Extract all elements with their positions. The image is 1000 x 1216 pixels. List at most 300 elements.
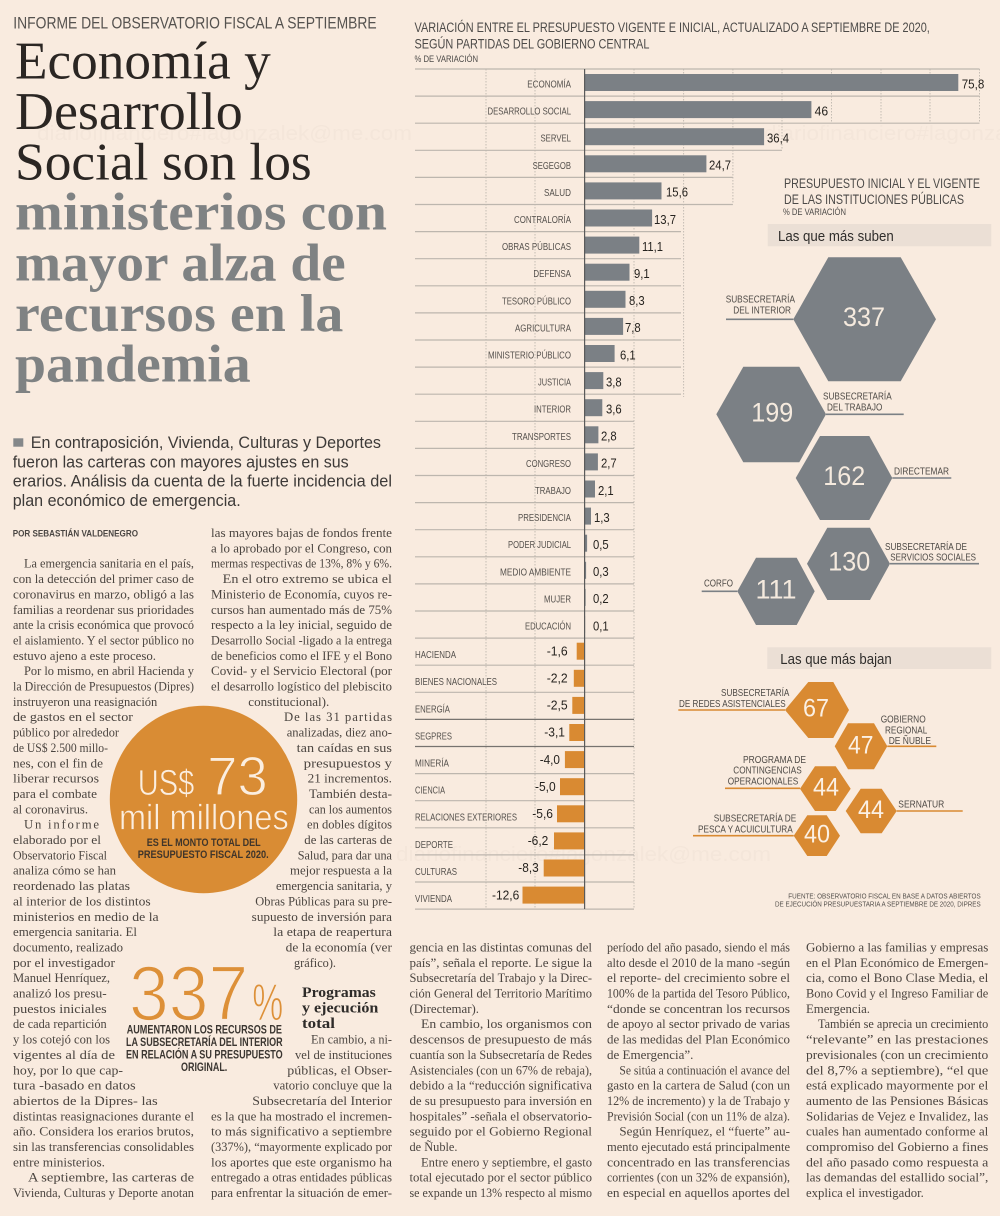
body text: column 3: de Ñuble. — [410, 1140, 458, 1154]
body text: column 1: familias a reordenar sus prioridades — [13, 603, 194, 617]
watermark: diariofinanciero#lagonzalek@me.com — [396, 844, 771, 866]
subheading — [13, 434, 392, 510]
body text: column 1: la Dirección de Presupuestos (Dipres) — [13, 680, 194, 694]
row: Justicia: JUSTICIA — [538, 378, 571, 389]
subheading: Programas y ejecución total — [302, 985, 379, 1032]
body text: column 2: de beneficios como el IFE y el Bono — [211, 649, 392, 663]
body text: column 2: para enfrentar la situación de emer- — [211, 1186, 392, 1200]
body text: column 5: está explicado mayormente por el — [806, 1079, 989, 1093]
row: Tesoro Público — [502, 291, 645, 308]
body text: column 2: el desarrollo logístico del plebiscito — [211, 680, 392, 694]
row: Deporte: -6,2 — [528, 834, 548, 848]
callout: 337%: EN RELACIÓN A SU PRESUPUESTO — [126, 1047, 283, 1061]
body text: column 3: ción General del Territorio Marítimo — [410, 986, 592, 1000]
body text: column 1: con la detección del primer caso de — [13, 572, 194, 586]
hexagon: Programa de Contingencias Operacionales 44 — [725, 754, 851, 811]
body text: column 2: De las 31 partidas — [284, 710, 392, 724]
callout: US$ 73 mil millones: 73 — [207, 745, 268, 807]
watermark — [37, 123, 1000, 866]
body text: column 2: constitucional). — [248, 695, 329, 709]
hexagon: Subsecretaría de Pesca y Acuicultura 40: PESCA Y ACUICULTURA — [698, 823, 793, 835]
row: Justicia — [538, 372, 622, 389]
title: ministerios con — [15, 183, 387, 241]
row: Presidencia: 1,3 — [594, 511, 610, 525]
body text: column 5: cia, como el Bono Clase Media, el — [806, 971, 989, 985]
body text: column 2: gráfico). — [294, 956, 336, 970]
body text: column 4: 12% de incremento) y la de Trabajo y — [607, 1094, 791, 1108]
chart heading — [414, 20, 930, 64]
row: Mujer: 0,2 — [593, 592, 609, 606]
row: Transportes: TRANSPORTES — [512, 432, 571, 443]
row: Segegob — [533, 155, 731, 173]
subheading: plan económico de emergencia. — [13, 492, 241, 510]
source note — [775, 891, 981, 908]
body text: column 2: Salud, para dar una — [298, 848, 392, 862]
body text: column 5: También se aprecia un crecimiento — [818, 1017, 988, 1031]
body text: column 2: de la economía (ver — [286, 940, 393, 954]
callout: 337%: LA SUBSECRETARÍA DEL INTERIOR — [126, 1035, 283, 1049]
row: Contraloría — [514, 210, 676, 227]
hexagon: Subsecretaría del Interior 337: 337 — [843, 302, 885, 332]
row: Hacienda: -1,6 — [547, 644, 568, 658]
row: Ciencia — [415, 778, 585, 797]
hexagon: Subsecretaría de Pesca y Acuicultura 40: 40 — [804, 820, 830, 848]
body text: column 3: gencia en las distintas comunas del — [410, 940, 592, 954]
row: Interior: INTERIOR — [534, 405, 571, 416]
title: recursos en la — [15, 285, 343, 343]
row: Bienes Nacionales: -2,2 — [547, 672, 568, 686]
body text: column 4: concentrado en las transferencias — [607, 1155, 790, 1169]
body text: column 1: A septiembre, las carteras de — [28, 1171, 194, 1185]
body text: column 3: total ejecutado por el sector público — [410, 1171, 592, 1185]
callout: 337% — [126, 949, 283, 1074]
body text: column 2: En cambio, a ni- — [311, 1033, 392, 1047]
row: Energía: ENERGÍA — [415, 702, 450, 715]
row: Trabajo — [535, 480, 614, 498]
body text: column 4: gasto en la cartera de Salud (con un — [607, 1079, 791, 1093]
watermark: diariofinanciero#lagonzalek@me.com — [37, 123, 412, 145]
subheading: Programas y ejecución total: y ejecución — [302, 1001, 379, 1017]
hexagon: Subsecretaría de Redes Asistenciales 67: DE REDES ASISTENCIALES — [679, 698, 786, 710]
hexagon: Directemar 162 — [796, 436, 951, 520]
body text: column 2: Obras Públicas para su pre- — [255, 894, 392, 908]
body text: column 4: 100% de la partida del Tesoro Público, — [607, 986, 790, 1000]
subheading: erarios. Análisis da cuenta de la fuerte incidencia del — [13, 473, 392, 491]
body text: column 3: se expande un 13% respecto al mismo — [410, 1186, 592, 1200]
body text: column 1: Un informe — [24, 818, 99, 832]
body text: column 2: mermas respectivas de 13%, 8% y 6%. — [211, 557, 392, 571]
body text: column 1: entre ministerios. — [13, 1155, 105, 1169]
subheading: Programas y ejecución total: total — [302, 1016, 335, 1032]
subheading: fueron las carteras con mayores ajustes en sus — [13, 453, 349, 471]
callout: US$ 73 mil millones — [110, 706, 297, 893]
title: mayor alza de — [15, 235, 346, 293]
row: Medio Ambiente: MEDIO AMBIENTE — [500, 567, 571, 578]
body text: column 2: to más significativo a septiembre — [211, 1125, 392, 1139]
hexagon: Corfo 111: 111 — [756, 574, 796, 604]
body text: column 2: Subsecretaría del Interior — [252, 1094, 393, 1108]
hexagon: Directemar 162: 162 — [823, 461, 865, 491]
body text: column 1: ministerios en medio de la — [13, 910, 159, 924]
body text: column 1: tura -basado en datos — [13, 1079, 136, 1093]
body text: column 3: En cambio, los organismos con — [421, 1017, 593, 1031]
row: Culturas: -8,3 — [518, 861, 539, 875]
hexagon: Subsecretaría de Redes Asistenciales 67: 67 — [803, 695, 829, 723]
panel heading: las que más bajan: Las que más bajan — [780, 651, 892, 668]
row: Interior: 3,6 — [606, 403, 622, 417]
body text: column 1: de gastos en el sector — [13, 710, 134, 724]
body text: column 1: al interior de los distintos — [13, 894, 151, 908]
body text: column 2: Desarrollo Social -ligado a la entrega — [211, 634, 392, 648]
row: Ministerio Público — [488, 345, 636, 362]
body text: column 2: es la que ha mostrado el incremen- — [211, 1109, 392, 1123]
body text: column 3: país”, señala el reporte. Le sigue la — [410, 956, 592, 970]
title: Social son los — [15, 133, 312, 191]
hexagon: Subsecretaría de Servicios Sociales 130: 130 — [828, 546, 870, 576]
body text: column 5: Gobierno a las familias y empresas — [806, 940, 988, 954]
body text: column 4: corrientes (con un 32% de expansión), — [607, 1171, 790, 1185]
row: Obras Públicas: OBRAS PÚBLICAS — [502, 240, 571, 253]
bar chart: variación por partida — [415, 69, 984, 909]
hexagon: Sernatur 44: SERNATUR — [898, 799, 945, 811]
body text: column 1: liberar recursos — [13, 772, 99, 786]
hexagon: Programa de Contingencias Operacionales 44: 44 — [813, 774, 839, 802]
body text: column 1: analiza cómo se han — [13, 864, 117, 878]
body text: column 5: las demandas del estallido social”, — [806, 1171, 988, 1185]
hexagon: Sernatur 44: 44 — [858, 796, 884, 824]
body text: column 3: Subsecretaría del Trabajo y la Direc- — [410, 971, 592, 985]
body text: column 2: de las carteras de — [304, 833, 392, 847]
body text: column 2: en dobles dígitos — [307, 818, 392, 832]
row: Medio Ambiente — [500, 562, 609, 579]
body text: column 1: Observatorio Fiscal — [13, 848, 107, 862]
row: Poder Judicial: PODER JUDICIAL — [508, 540, 571, 551]
body text: column 4: mento ejecutado está principalmente — [607, 1140, 790, 1154]
row: Segpres: SEGPRES — [415, 731, 452, 742]
body text: column 3: debido a la “reducción significativa — [410, 1079, 592, 1093]
body text: column 5: explica el investigador. — [806, 1186, 924, 1200]
row: Ciencia: -5,0 — [535, 780, 556, 794]
body text: column 1: nes, con el fin de — [13, 756, 103, 770]
body text: column 1: coronavirus en marzo, obligó a las — [13, 587, 194, 601]
body text: column 1: La emergencia sanitaria en el país, — [24, 557, 194, 571]
row: Obras Públicas: 11,1 — [642, 240, 663, 254]
row: Servel: 36,4 — [767, 131, 789, 145]
body text: column 5: en el Plan Económico de Emergen- — [806, 956, 988, 970]
body text: column 2: Covid- y el Servicio Electoral (por — [211, 664, 393, 678]
body text: column 5: del año pasado como respuesta a — [806, 1155, 989, 1169]
hexagon: Subsecretaría de Servicios Sociales 130: SUBSECRETARÍA DE — [885, 540, 967, 553]
body text: column 4: Según Henríquez, el “fuerte” au- — [619, 1125, 790, 1139]
body text: column 3: seguido por el Gobierno Regional — [410, 1125, 593, 1139]
row: Defensa: DEFENSA — [533, 269, 571, 280]
body text: column 4: “donde se concentran los recursos — [607, 1002, 790, 1016]
body text: column 1: sin las transferencias consolidables — [13, 1140, 194, 1154]
row: Energía — [415, 697, 585, 715]
body text: column 1: analizó los presu- — [13, 986, 107, 1000]
callout: 337%: ORIGINAL. — [181, 1060, 227, 1074]
row: Hacienda — [415, 643, 585, 661]
row: Ministerio Público: 6,1 — [620, 348, 636, 362]
row: Culturas: CULTURAS — [415, 867, 457, 878]
hexagon: Programa de Contingencias Operacionales 44: PROGRAMA DE — [743, 754, 806, 766]
row: Justicia: 3,8 — [606, 375, 622, 389]
body text: column 4: de las medidas del Plan Económico — [607, 1033, 790, 1047]
body text: column 3: Asistenciales (con un 67% de rebaja), — [410, 1063, 592, 1077]
callout: US$ 73 mil millones: PRESUPUESTO FISCAL 2020. — [138, 849, 269, 861]
callout: 337%: AUMENTARON LOS RECURSOS DE — [127, 1022, 282, 1036]
hexagon: Subsecretaría de Servicios Sociales 130: SERVICIOS SOCIALES — [890, 552, 976, 564]
body text: column 3: cuantía son la Subsecretaría de Redes — [410, 1048, 592, 1062]
body text: column 1: reordenado las platas — [13, 879, 130, 893]
body text: column 1: año. Considera los erarios brutos, — [13, 1125, 194, 1139]
body text: column 5: “relevante” en las prestaciones — [806, 1033, 988, 1047]
body text: column 1: estuvo ajeno a este proceso. — [13, 649, 156, 663]
callout: US$ 73 mil millones: US$ — [138, 762, 194, 803]
body text: column 4: período del año pasado, siendo el más — [607, 940, 790, 954]
body text: column 2: respecto a la ley inicial, seguido de — [211, 618, 392, 632]
hexagon: Directemar 162: DIRECTEMAR — [894, 465, 949, 477]
subheading: Programas y ejecución total: Programas — [302, 985, 376, 1001]
callout: US$ 73 mil millones: ES EL MONTO TOTAL DEL — [147, 837, 261, 849]
body text: column 1: Manuel Henríquez, — [13, 971, 110, 985]
row: Servel: SERVEL — [540, 134, 571, 145]
row: Energía: -2,5 — [547, 699, 568, 713]
row: Segpres: -3,1 — [544, 726, 565, 740]
row: Minería — [415, 751, 585, 770]
body text: column 2: públicas, el Obser- — [287, 1063, 392, 1077]
row: Vivienda — [415, 887, 585, 905]
body text: column 1: público por alrededor — [13, 726, 120, 740]
row: Economía — [527, 74, 984, 91]
hexagon: Subsecretaría de Servicios Sociales 130 — [807, 528, 979, 600]
row: Mujer: MUJER — [544, 594, 571, 605]
body text: column 5: previsionales (con un crecimiento — [806, 1048, 988, 1062]
body text: column 1: Vivienda, Culturas y Deporte anotan — [13, 1186, 195, 1200]
row: Congreso: 2,7 — [601, 457, 617, 471]
row: Minería: MINERÍA — [415, 756, 449, 770]
callout: 337%: % — [252, 974, 283, 1032]
body text: column 2: tan caídas en sus — [297, 741, 392, 755]
heading: presupuesto inicial y vigente — [783, 176, 980, 217]
body text: column 3: de su presupuesto para inversión en — [410, 1094, 593, 1108]
row: Medio Ambiente: 0,3 — [593, 565, 609, 579]
hexagon: Gobierno Regional de Ñuble 47: REGIONAL — [885, 724, 927, 736]
row: Mujer — [544, 589, 609, 606]
row: Ministerio Público: MINISTERIO PÚBLICO — [488, 348, 571, 362]
row: Deporte — [415, 832, 585, 851]
row: Ciencia: CIENCIA — [415, 786, 445, 797]
body text: column 2: vatorio concluye que la — [273, 1079, 392, 1093]
row: Servel — [540, 128, 789, 146]
row: Congreso: CONGRESO — [526, 459, 571, 470]
body text: column 2: la etapa de reapertura — [273, 925, 392, 939]
title: Economía y — [15, 32, 271, 90]
row: Segegob: SEGEGOB — [533, 161, 571, 172]
row: Presidencia — [518, 508, 610, 525]
row: Interior — [534, 399, 622, 416]
row: Contraloría: 13,7 — [654, 213, 676, 227]
body text: column 4: alto desde el 2010 de la mano -según — [607, 956, 791, 970]
row: Trabajo: 2,1 — [598, 484, 614, 498]
body text: column 5: del 8,7% a septiembre), “el que — [806, 1063, 989, 1077]
row: Contraloría: CONTRALORÍA — [514, 213, 571, 226]
row: Agricultura: AGRICULTURA — [515, 323, 571, 334]
body text: column 1: al coronavirus. — [13, 802, 88, 816]
row: Vivienda: -12,6 — [492, 888, 519, 902]
row: Relaciones Exteriores: -5,6 — [532, 807, 553, 821]
body text: column 5: Emergencia. — [806, 1002, 870, 1016]
row: Bienes Nacionales: BIENES NACIONALES — [415, 677, 497, 688]
hexagon: Gobierno Regional de Ñuble 47 — [835, 714, 936, 769]
body text: column 1: documento, realizado — [13, 940, 123, 954]
heading: presupuesto inicial y vigente: % DE VARIACIÓN — [783, 207, 846, 217]
body text: column 1: distintas reasignaciones durante el — [13, 1109, 194, 1123]
body text: column 1: el aislamiento. Y el sector público no — [13, 634, 194, 648]
hexagon: Subsecretaría del Trabajo 199: DEL TRABAJO — [827, 401, 882, 413]
body text: column 5: Solidarias de Vejez e Invalidez, las — [806, 1109, 988, 1123]
hexagon: Programa de Contingencias Operacionales 44: OPERACIONALES — [728, 775, 798, 787]
body text: column 2: vel de instituciones — [295, 1048, 392, 1062]
body text: column 2: (337%), “mayormente explicado por — [211, 1140, 393, 1154]
hexagon: Subsecretaría de Redes Asistenciales 67: SUBSECRETARÍA — [721, 686, 789, 699]
hexagon: Programa de Contingencias Operacionales 44: CONTINGENCIAS — [733, 765, 802, 777]
hexagon: Subsecretaría del Interior 337 — [726, 257, 936, 381]
row: Deporte: DEPORTE — [415, 840, 453, 851]
row: Obras Públicas — [502, 237, 663, 254]
body text: column 3: Entre enero y septiembre, el gasto — [421, 1155, 592, 1169]
body text: column 1: por el investigador — [13, 956, 116, 970]
body text: column 1: de US$ 2.500 millo- — [13, 741, 108, 755]
body text: column 5: aumento de las Pensiones Básicas — [806, 1094, 988, 1108]
body text: column 5 — [806, 940, 989, 1200]
body text: column 2: cursos han aumentado más de 75% — [211, 603, 392, 617]
body text: column 1: Por lo mismo, en abril Hacienda y — [24, 664, 195, 678]
subheading: En contraposición, Vivienda, Culturas y Deportes — [31, 434, 381, 452]
row: Economía: 75,8 — [962, 77, 984, 91]
body text: column 1: instruyeron una reasignación — [13, 695, 158, 709]
body text: column 5: compromiso del Gobierno a fines — [806, 1140, 988, 1154]
row: Relaciones Exteriores: RELACIONES EXTERIORES — [415, 813, 517, 824]
hexagon: Corfo 111: CORFO — [704, 578, 733, 590]
row: Segpres — [415, 724, 585, 742]
kicker: INFORME DEL OBSERVATORIO FISCAL A SEPTIEMBRE — [13, 13, 377, 32]
row: Hacienda: HACIENDA — [415, 650, 456, 661]
body text: column 2: presupuestos y — [304, 756, 393, 770]
hexagon: Sernatur 44 — [846, 789, 963, 833]
row: Poder Judicial: 0,5 — [593, 538, 609, 552]
body text: column 2: supuesto de inversión para — [252, 910, 392, 924]
body text: column 2: entregado a otras entidades públicas — [211, 1171, 392, 1185]
row: Tesoro Público: 8,3 — [629, 294, 645, 308]
row: Agricultura: 7,8 — [625, 321, 641, 335]
body text: column 4: Se sitúa a continuación el avance del — [619, 1063, 790, 1077]
title — [15, 32, 387, 394]
body text: column 2: En el otro extremo se ubica el — [223, 572, 393, 586]
row: Segegob: 24,7 — [709, 159, 731, 173]
body text: column 2: las mayores bajas de fondos frente — [211, 526, 392, 540]
body text: column 3: (Directemar). — [410, 1002, 479, 1016]
title: Desarrollo — [15, 83, 243, 141]
callout: 337%: 337 — [129, 949, 248, 1037]
body text: column 3 — [410, 940, 593, 1200]
row: Defensa — [533, 264, 650, 281]
body text: column 1: de cada repartición — [13, 1017, 107, 1031]
body text: column 3: descensos de presupuesto de más — [410, 1033, 592, 1047]
body text: column 2: a lo aprobado por el Congreso, con — [211, 541, 393, 555]
body text: column 1: abiertos de la Dipres- las — [13, 1094, 158, 1108]
body text: column 2: los aportes que este organismo ha — [211, 1155, 392, 1169]
hexagon: Gobierno Regional de Ñuble 47: GOBIERNO — [881, 714, 926, 726]
body text: column 2: can los aumentos — [309, 802, 392, 816]
body text: column 2 — [211, 526, 393, 1200]
body text: column 2: emergencia sanitaria, y — [276, 879, 393, 893]
hexagon: Subsecretaría del Trabajo 199 — [716, 367, 904, 462]
hexagon: Subsecretaría del Interior 337: DEL INTERIOR — [733, 305, 791, 317]
body text: column 4: el reporte- del crecimiento sobre el — [607, 971, 790, 985]
row: Poder Judicial — [508, 535, 609, 552]
hexagon: Corfo 111 — [702, 558, 815, 625]
body text: column 2: mejor respuesta a la — [290, 864, 392, 878]
row: Presidencia: PRESIDENCIA — [518, 513, 571, 524]
hexagon: Subsecretaría del Trabajo 199: SUBSECRETARÍA — [823, 389, 892, 402]
row: Educación: EDUCACIÓN — [525, 620, 571, 632]
body text: column 1: puestos iniciales — [13, 1002, 107, 1016]
hexagon: Subsecretaría de Pesca y Acuicultura 40: SUBSECRETARÍA DE — [714, 812, 796, 825]
body text: column 4: de apoyo al sector privado de varias — [607, 1017, 790, 1031]
row: Relaciones Exteriores — [415, 805, 585, 824]
body text: column 3: hospitales” -señala el observatorio- — [410, 1109, 592, 1123]
row: Agricultura — [515, 318, 641, 335]
hexagon: Subsecretaría de Redes Asistenciales 67 — [678, 682, 849, 738]
row: Transportes — [512, 426, 617, 444]
body text: column 1: y los cotejó con los — [13, 1033, 110, 1047]
title: pandemia — [15, 336, 251, 394]
body text: column 1: ante la crisis económica que provocó — [13, 618, 194, 632]
row: Desarrollo Social — [488, 101, 828, 118]
hexagon: Gobierno Regional de Ñuble 47: 47 — [848, 731, 873, 759]
row: Salud — [544, 182, 688, 200]
row: Culturas — [415, 860, 585, 878]
body text: column 5: Bono Covid y el Ingreso Familiar de — [806, 986, 989, 1000]
row: Congreso — [526, 453, 617, 471]
body text: column 1: hoy, por lo que cap- — [13, 1063, 123, 1077]
hexagon: Gobierno Regional de Ñuble 47: DE ÑUBLE — [889, 734, 931, 747]
body text: column 2: 21 incrementos. — [308, 772, 392, 786]
row: Minería: -4,0 — [540, 753, 560, 767]
body text: column 2: analizadas, diez ano- — [287, 726, 392, 740]
row: Educación — [525, 616, 609, 633]
panel heading: las que más suben: Las que más suben — [778, 228, 894, 245]
row: Salud: SALUD — [544, 188, 571, 199]
row: Economía: ECONOMÍA — [527, 78, 571, 90]
body text: column 1: emergencia sanitaria. El — [13, 925, 137, 939]
hexagon: Subsecretaría del Interior 337: SUBSECRETARÍA — [726, 293, 795, 306]
body text: column 2: Ministerio de Economía, cuyos re- — [211, 587, 392, 601]
body text: column 1: para el combate — [13, 787, 97, 801]
hexagon: Subsecretaría de Pesca y Acuicultura 40 — [693, 812, 840, 856]
panel heading: las que más bajan — [767, 647, 991, 669]
body text: column 5: cuales han aumentado conforme al — [806, 1125, 989, 1139]
body text: column 4: Previsión Social (con un 11% de alza). — [607, 1109, 790, 1123]
body text: column 4: de Emergencia”. — [607, 1048, 693, 1062]
row: Trabajo: TRABAJO — [535, 486, 571, 497]
row: Desarrollo Social: 46 — [815, 104, 828, 118]
row: Desarrollo Social: DESARROLLO SOCIAL — [488, 107, 571, 118]
row: Defensa: 9,1 — [634, 267, 650, 281]
panel heading: las que más suben — [768, 224, 991, 246]
body text: column 4 — [607, 940, 791, 1200]
